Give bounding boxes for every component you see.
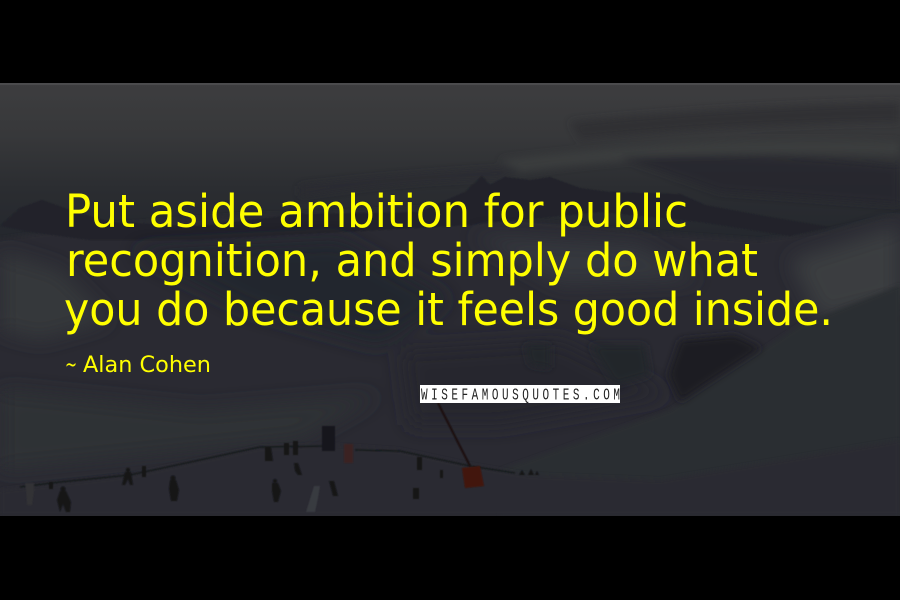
foreground snow xyxy=(0,440,900,516)
quote line 1: Put aside ambition for public xyxy=(65,185,688,238)
far dark mountain ridge xyxy=(0,176,830,240)
ski lift tower xyxy=(322,426,353,463)
author: Alan Cohen xyxy=(83,353,211,378)
watermark badge: WISEFAMOUSQUOTES.COM xyxy=(421,386,620,405)
fence line xyxy=(20,446,515,487)
snow hills xyxy=(0,205,900,516)
skiers xyxy=(25,441,539,512)
quote line 3: you do because it feels good inside. xyxy=(64,283,833,336)
textured slopes xyxy=(0,225,900,470)
sky with clouds xyxy=(0,83,900,516)
dark rocks xyxy=(525,335,762,402)
right foreground slope xyxy=(500,285,900,516)
author: ~ xyxy=(65,353,77,378)
quote line 2: recognition, and simply do what xyxy=(66,234,758,287)
lift pole and red box xyxy=(438,403,484,488)
quote text xyxy=(64,185,833,336)
bottom edge cover xyxy=(0,516,900,600)
